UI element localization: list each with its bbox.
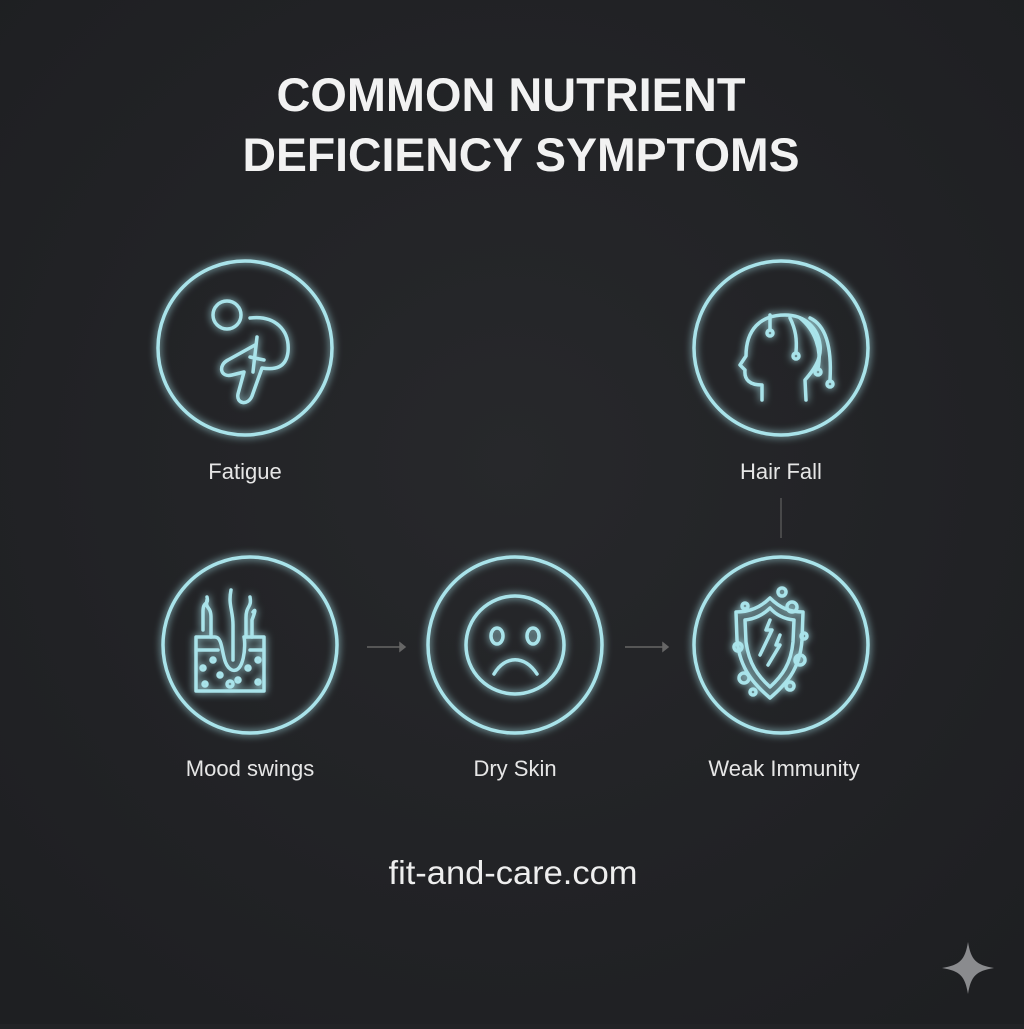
- footer url: fit-and-care.com: [388, 854, 638, 891]
- item: dry skin: [428, 557, 602, 781]
- title: COMMON NUTRIENT: [276, 68, 746, 121]
- label: hair fall: Hair Fall: [740, 459, 822, 484]
- icon: sad face: [428, 557, 602, 733]
- item: weak immunity: [694, 557, 868, 781]
- label: dry skin: Dry Skin: [473, 756, 557, 781]
- icon: sparkle: [942, 942, 994, 994]
- arrow: dry skin to weak immunity: [625, 643, 668, 651]
- label: weak immunity: Weak Immunity: [708, 756, 860, 781]
- title: DEFICIENCY SYMPTOMS: [242, 128, 800, 181]
- item: fatigue: [158, 261, 332, 484]
- label: fatigue: Fatigue: [208, 459, 282, 484]
- icon: head with hair: [694, 261, 868, 435]
- icon: shield: [694, 557, 868, 733]
- item: mood swings: [163, 557, 337, 781]
- arrow: mood to dry skin: [367, 643, 405, 651]
- item: hair fall: [694, 261, 868, 484]
- icon: skin layers: [163, 557, 337, 733]
- label: mood swings: Mood swings: [186, 756, 314, 781]
- title: [242, 68, 800, 181]
- arrow: hair fall to weak immunity: [780, 498, 782, 538]
- icon: fatigue: [158, 261, 332, 435]
